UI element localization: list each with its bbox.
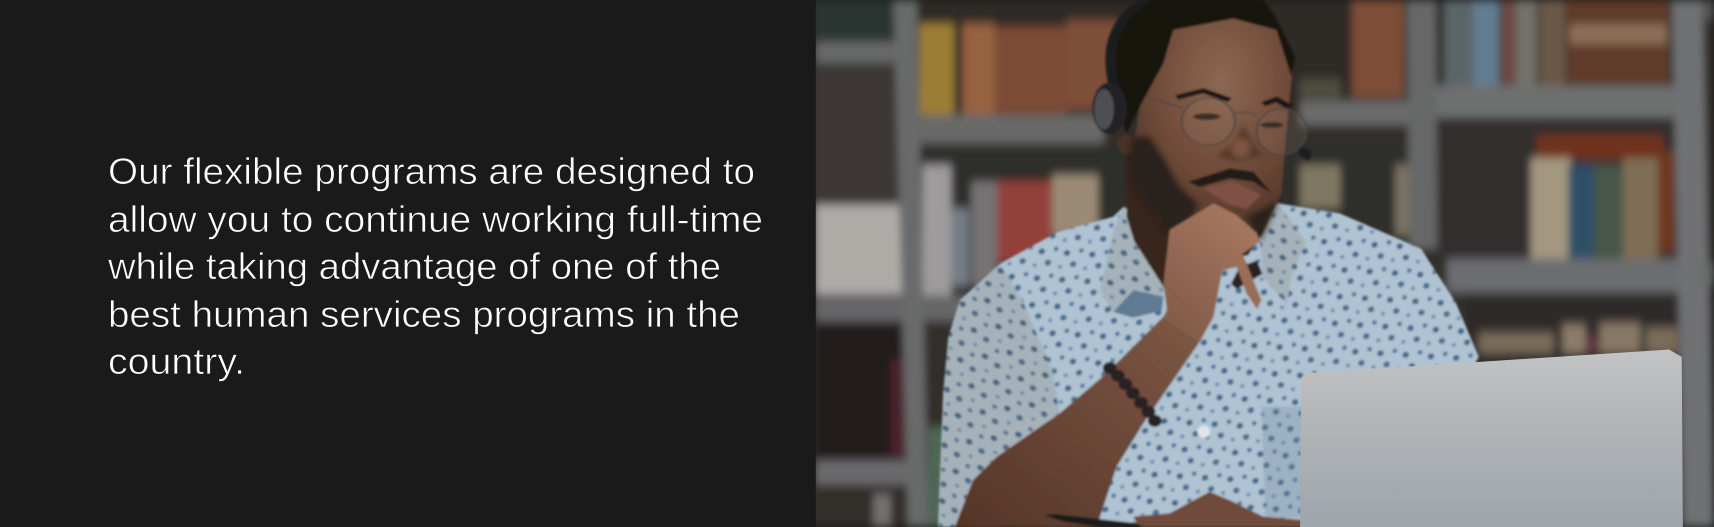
figure: man in patterned shirt [938,0,1479,527]
glasses [1147,97,1306,155]
shirt [938,203,1479,527]
shirt pocket shade [1261,407,1307,518]
arm [955,317,1200,527]
face [1133,18,1293,242]
under-finger gap [1231,260,1263,289]
hair [1106,0,1295,133]
facial hair [1128,136,1278,241]
text block: program description: country. [108,341,245,382]
lips [1203,182,1261,209]
background: blurred bookshelves [810,0,1714,527]
text block: program description: allow you to continue working full-time [108,199,763,240]
collar right [1260,203,1306,305]
text block: program description: best human services programs in the [108,294,740,335]
text block: program description: Our flexible programs are designed to [108,151,755,192]
eyes [1193,113,1283,128]
neck [1127,144,1271,287]
pen [1043,514,1143,527]
ear [1117,134,1135,155]
panel edge: left photo border [810,0,816,527]
nose tip [1230,138,1251,158]
bracelet [1103,362,1162,427]
hand at chin [1163,203,1261,342]
panel: photo of man with headset at laptop [816,0,1714,527]
lower hand [1133,492,1303,527]
laptop [1300,350,1683,527]
headset [1092,0,1312,161]
rolled sleeve [938,264,1060,527]
text block: program description [107,151,763,382]
nose shadow [1216,124,1263,161]
panel: dark text panel [0,0,816,527]
eyebrows [1177,91,1290,107]
shirt button [1197,425,1210,438]
text block: program description: while taking advantage of one of the [107,246,721,287]
moustache [1188,168,1272,193]
under-collar shadow [1113,290,1163,318]
collar left [1100,207,1163,312]
